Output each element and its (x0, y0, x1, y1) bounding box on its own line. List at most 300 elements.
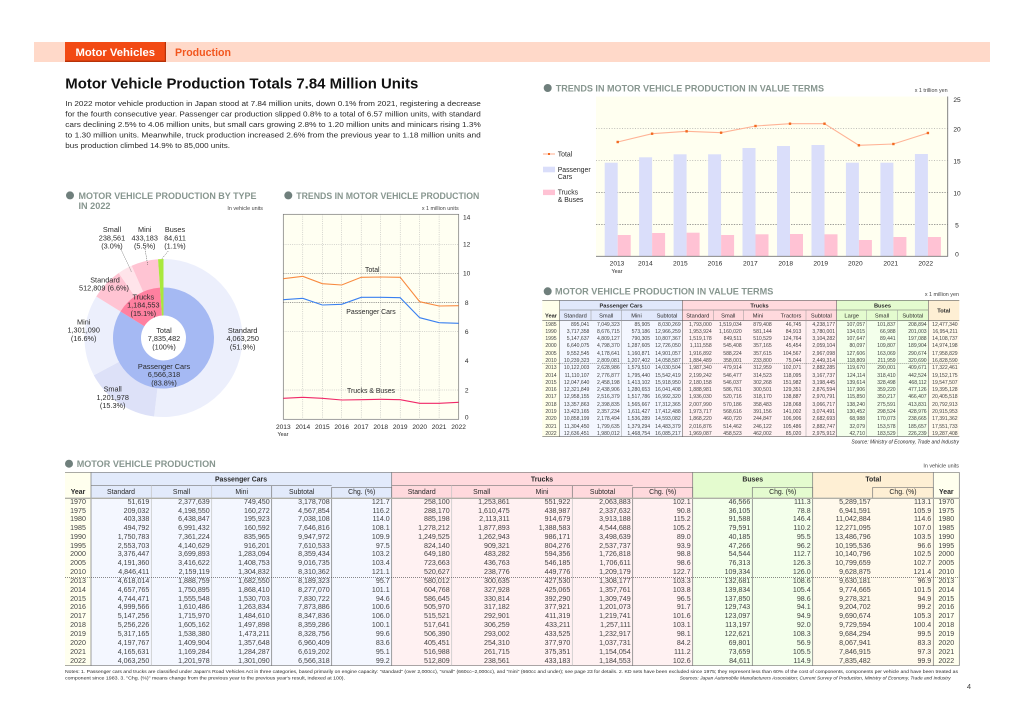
table data: 1970 to 2010: 804,276 (545, 542, 570, 550)
table data: 1970 to 2010: 546,185 (545, 559, 570, 567)
table data: 17,312,365 (655, 402, 681, 408)
table data: 1970 to 2010: 121.7 (372, 498, 390, 506)
table column headers: Mini (536, 489, 549, 496)
table data: 12,726,050 (655, 343, 681, 349)
notes: Sources: Japan Automobile Manufacturers Association; Current Survey of Production, Ministry of Economy, Trade and Industry (680, 675, 951, 681)
panel: value trends (543, 82, 961, 275)
donut labels: Mini (138, 225, 152, 234)
table data: 1970 to 2010: 551,922 (545, 498, 570, 506)
table data: 1970 to 2010: 10,799,659 (835, 559, 871, 567)
table data: 2013 to 2022: 433,211 (545, 621, 570, 629)
table data: 10,807,367 (655, 336, 681, 342)
table data: 460,720 (723, 416, 742, 422)
table data: 1970 to 2010: 114.6 (914, 515, 931, 523)
table column headers: Standard (564, 314, 587, 320)
table column headers (71, 476, 954, 496)
table data: 2013 to 2022: 132,681 (725, 577, 750, 585)
table data: 1970 to 2010: 112.7 (793, 550, 811, 558)
y axis labels (953, 97, 961, 258)
donut labels: Passenger Cars (138, 362, 191, 371)
x axis labels: 2015 (315, 424, 330, 431)
line chart (283, 214, 459, 419)
table data: 1970 to 2010: 54,544 (729, 550, 750, 558)
table data: 17,322,461 (932, 365, 958, 371)
table data: 2,967,098 (812, 351, 835, 357)
table data: 1970 to 2010: 116.2 (372, 507, 390, 515)
table data: 16,954,211 (933, 329, 958, 335)
table data: 1,611,427 (628, 409, 650, 415)
table data: 12,958,155 (564, 394, 589, 400)
x axis labels (276, 424, 466, 438)
table data: 358,483 (753, 402, 772, 408)
table data: 3,167,737 (812, 373, 835, 379)
donut labels: 1,201,978 (96, 393, 129, 402)
table data: 211,959 (878, 358, 896, 364)
table data: 1970 to 2010: 909,321 (484, 542, 510, 550)
donut labels: 4,063,250 (226, 334, 259, 343)
table data: 197,088 (908, 336, 927, 342)
table data: 1970 to 2010: 105.2 (673, 524, 691, 532)
table data: 1,953,924 (689, 329, 712, 335)
table data: 1970 to 2010: 1970 (70, 498, 86, 506)
donut labels: (1.1%) (164, 242, 186, 251)
table data: 11,304,450 (564, 424, 589, 430)
table data: 189,904 (908, 343, 927, 349)
x axis labels: 2020 (848, 261, 863, 268)
table data: 2013 to 2022: 83.3 (917, 639, 931, 647)
table data: 298,524 (877, 409, 896, 415)
table data: 2013 to 2022: 84,611 (729, 657, 750, 665)
table data: 1970 to 2010: 1,408,753 (238, 559, 270, 567)
table data: 2013 to 2022: 580,012 (424, 577, 450, 585)
table data: 19,152,175 (932, 373, 958, 379)
y axis labels: 12 (463, 242, 471, 249)
header band (34, 42, 990, 62)
table data: 2,449,314 (812, 358, 835, 364)
table data: 2013 to 2022: 2015 (70, 595, 86, 603)
table data: 1970 to 2010: 195,923 (244, 515, 270, 523)
table data: 1970 to 2010: 108.1 (372, 524, 390, 532)
table data: 2013 to 2022: 7,835,482 (839, 657, 871, 665)
table data: 233,800 (753, 358, 772, 364)
table data: 1970 to 2010: 114.0 (372, 515, 390, 523)
donut labels (67, 225, 259, 410)
table data: 2013 to 2022: 2021 (938, 648, 954, 656)
table data: 1970 to 2010: 2,113,311 (479, 515, 510, 523)
table data: 2013 to 2022: 1,309,749 (599, 595, 631, 603)
table data: 2013 to 2022: 94.9 (917, 595, 931, 603)
table data: 2013 to 2022: 1,201,073 (599, 603, 631, 611)
table data: 1970 to 2010: 6,941,591 (839, 507, 871, 515)
table data: 12,477,340 (932, 322, 958, 328)
legend: Total (558, 151, 573, 158)
table data: 2013 to 2022: 293,002 (484, 630, 510, 638)
table data: 46,745 (786, 322, 801, 328)
table column headers: Year (545, 314, 558, 320)
table data: 2,199,242 (689, 373, 712, 379)
table data: 1970 to 2010: 96.2 (797, 542, 811, 550)
y axis labels: 20 (953, 126, 961, 133)
series labels (346, 267, 396, 395)
table data: 2,628,986 (597, 365, 620, 371)
table data: 2013 to 2022: 100.6 (372, 603, 390, 611)
intro paragraph (65, 99, 481, 150)
tab: Motor Vehicles (65, 42, 166, 62)
y axis labels: 8 (465, 300, 469, 307)
table data: 1970 to 2010: 1,262,943 (478, 533, 510, 541)
table data: 115,850 (847, 394, 865, 400)
table data: 2013 to 2022: 392,290 (545, 595, 570, 603)
x axis labels: 2018 (373, 424, 388, 431)
table data: 1970 to 2010: 1,610,475 (478, 507, 510, 515)
table data: 2,180,158 (689, 380, 712, 386)
table data: 1970 to 2010: 483,282 (484, 550, 510, 558)
table data: 1970 to 2010: 4,198,550 (178, 507, 210, 515)
table data: 2013 to 2022: 83.6 (376, 639, 390, 647)
table data: 2,016,876 (689, 424, 712, 430)
table data: 2013 to 2022: 433,525 (545, 630, 570, 638)
table data: 1,799,635 (597, 424, 620, 430)
table data: 2013 to 2022: 9,729,594 (839, 621, 871, 629)
table data: 45,454 (786, 343, 801, 349)
table data: 66,988 (880, 329, 896, 335)
table data: 2013 to 2022: 97.3 (917, 648, 931, 656)
table data: 290,001 (877, 365, 896, 371)
table data: 2013 to 2022: 586,645 (424, 595, 450, 603)
legend (543, 151, 591, 204)
table data: 2013 to 2022: 2014 (70, 586, 86, 594)
x axis labels: 2019 (813, 261, 828, 268)
table data: 1970 to 2010: 1975 (938, 507, 954, 515)
table data: 2013 to 2022: 261,715 (484, 648, 510, 656)
x axis labels: Year (612, 269, 623, 275)
table data: 1970 to 2010: 7,361,224 (178, 533, 210, 541)
unit note: x 1 million yen (925, 292, 959, 298)
table data: 1970 to 2010: 449,776 (545, 568, 570, 576)
table data: 2,178,494 (597, 416, 620, 422)
donut labels: (100%) (152, 342, 176, 352)
table data: 3,780,001 (812, 329, 835, 335)
table data: 2013 to 2022: 4,657,765 (118, 586, 149, 594)
table data: 3,104,282 (812, 336, 835, 342)
table data: 2,007,990 (689, 402, 712, 408)
table data: 2013 to 2022: 1,284,287 (238, 648, 270, 656)
table data: 2,357,234 (597, 409, 620, 415)
table data: 1970 to 2010: 103.4 (372, 559, 390, 567)
table lines (542, 300, 959, 437)
table data: 4,178,641 (597, 351, 620, 357)
table data: 1970 to 2010: 115.2 (673, 515, 691, 523)
table data: 107,057 (847, 322, 865, 328)
table data: 1970 to 2010: 4,140,629 (178, 542, 210, 550)
x axis labels: 2014 (638, 261, 653, 268)
table data: 16,992,320 (655, 394, 681, 400)
table data: 2013 to 2022: 1,473,211 (239, 630, 270, 638)
table data: 1970 to 2010: 2,159,119 (179, 568, 210, 576)
y axis labels: 25 (953, 97, 961, 104)
table data: 185,657 (908, 424, 927, 430)
table data: 15,542,419 (655, 373, 681, 379)
table data: 2013 to 2022: 425,065 (545, 586, 570, 594)
table data: 1970 to 2010: 105.9 (913, 507, 931, 515)
table data: 2013 to 2022: 101.1 (372, 586, 390, 594)
series labels: Passenger Cars (346, 309, 396, 316)
table data: 358,001 (723, 358, 742, 364)
table data: 1,868,220 (689, 416, 712, 422)
table data: 101,837 (877, 322, 896, 328)
table column headers: Subtotal (811, 314, 832, 320)
table data: 2013 to 2022: 105.5 (793, 648, 811, 656)
table data: 2013 to 2022: 108.3 (793, 630, 811, 638)
x axis labels: 2016 (334, 424, 349, 431)
table data: 462,002 (753, 431, 772, 437)
table data: 2013 to 2022: 427,530 (545, 577, 570, 585)
table data: 2013 to 2022: 1,154,054 (599, 648, 631, 656)
table data: 1970 to 2010: 3,913,188 (599, 515, 631, 523)
donut chart (84, 259, 242, 417)
table data: 80,097 (849, 343, 865, 349)
notes: component since 1983. 3. "Chg. (%)" means change from the previous year to the previous year's result, indexed at 100). (65, 675, 345, 681)
table data: 2013 to 2022: 56.9 (797, 639, 811, 647)
table data: 2013 to 2022: 7,846,915 (839, 648, 871, 656)
table data: 391,156 (753, 409, 772, 415)
intro paragraph: for the fourth consecutive year. Passenger car production slipped 0.8% to a total of 6.57 million units, with standard (65, 110, 481, 118)
line: total (283, 276, 459, 306)
table column headers: Subtotal (657, 314, 677, 320)
table data: 2013 to 2022: 254,310 (484, 639, 510, 647)
table data: 2013 to 2022: 2021 (70, 648, 86, 656)
table data: 117,906 (847, 387, 865, 393)
x axis labels: 2021 (432, 424, 447, 431)
legend: & Buses (558, 197, 584, 204)
heading (66, 190, 256, 211)
table data: 581,144 (753, 329, 772, 335)
table data: 1970 to 2010: 121.4 (913, 568, 931, 576)
table data: 2013 to 2022: 6,960,409 (298, 639, 330, 647)
table data: 1,160,871 (627, 351, 650, 357)
unit note: x 1 trillion yen (915, 88, 948, 94)
table data: 2013 to 2022: 377,921 (545, 603, 570, 611)
series labels: Total (365, 267, 380, 274)
table data: 1,519,178 (689, 336, 712, 342)
table data: 1,980,012 (597, 431, 620, 437)
table data: 84,913 (786, 329, 801, 335)
table data: 1990 (545, 329, 557, 335)
table data: 1970 to 2010: 93.9 (677, 542, 691, 550)
table data: 2013 to 2022: 1,357,761 (599, 586, 631, 594)
table data: 118,095 (783, 373, 801, 379)
table data: 568,616 (723, 409, 742, 415)
x axis labels: 2016 (708, 261, 723, 268)
legend: Passenger (558, 167, 591, 174)
table data: 413,831 (908, 402, 927, 408)
table data: 1,280,653 (627, 387, 650, 393)
table data: 5,147,637 (567, 336, 589, 342)
table data: 13,357,863 (564, 402, 589, 408)
x axis labels: 2022 (918, 261, 933, 268)
table data: 107,647 (847, 336, 865, 342)
table data: 1970 to 2010: 2000 (70, 550, 86, 558)
table column headers: Standard (686, 314, 709, 320)
table data: 879,408 (753, 322, 772, 328)
heading: MOTOR VEHICLE PRODUCTION (77, 458, 216, 469)
table data: 14,058,587 (655, 358, 681, 364)
table data: 2013 to 2022: 604,768 (424, 586, 450, 594)
table data: 20,405,518 (932, 394, 958, 400)
table data: 2013 to 2022: 91.7 (677, 603, 691, 611)
table data: 19,547,507 (932, 380, 958, 386)
table data: 17,391,362 (932, 416, 958, 422)
table column headers: Mini (631, 314, 642, 320)
table data: 75,044 (786, 358, 801, 364)
table data: 1970 to 2010: 79,591 (729, 524, 750, 532)
table column headers: Trucks (531, 476, 553, 483)
table data: 138,240 (847, 402, 865, 408)
table data: 2013 to 2022: 1,037,731 (599, 639, 631, 647)
table data: 2013 to 2022: 512,809 (424, 657, 450, 665)
table data: 3,717,358 (567, 329, 589, 335)
table data: 520,716 (723, 394, 742, 400)
table data: 1970 to 2010: 126.3 (793, 559, 811, 567)
table column headers: Mini (235, 489, 248, 496)
table data: 104,567 (783, 351, 801, 357)
table data: 2013 to 2022: 1,750,895 (178, 586, 210, 594)
table data: 105,486 (783, 424, 801, 430)
table data: 1970 to 2010: 98.6 (677, 559, 691, 567)
table data: 141,002 (783, 409, 801, 415)
table data: 1970 to 2010: 109,334 (725, 568, 750, 576)
table data: 312,959 (753, 365, 772, 371)
donut labels: 1,301,090 (67, 326, 100, 335)
table column headers: Chg. (%) (348, 489, 375, 496)
table data: 1,519,034 (719, 322, 742, 328)
table data: 2013 to 2022: 108.6 (793, 577, 811, 585)
table data: 1970 to 2010: 288,170 (424, 507, 450, 515)
table data: 318,410 (877, 373, 896, 379)
table data: 1970 to 2010: 436,763 (484, 559, 510, 567)
table data: 2013 to 2022: 114.9 (793, 657, 811, 665)
table column headers: Small (173, 489, 191, 496)
table data: 302,268 (753, 380, 772, 386)
intro paragraph: bus production climbed 14.9% to 85,000 units. (65, 141, 230, 150)
panel: production trends (276, 190, 480, 438)
table data: 318,170 (753, 394, 772, 400)
table data: 1970 to 2010: 824,140 (424, 542, 450, 550)
table data: 2013 to 2022: 8,277,070 (298, 586, 330, 594)
table data: 2013 to 2022: 9,774,665 (839, 586, 871, 594)
table data: 89,441 (880, 336, 896, 342)
table column headers: Passenger Cars (215, 476, 267, 483)
table data: 1970 to 2010: 103.2 (372, 550, 390, 558)
table data: 1,884,489 (689, 358, 712, 364)
table data: 2013 to 2022: 103.8 (673, 586, 691, 594)
leader lines (121, 248, 168, 272)
table data: 2013 to 2022: 8,347,836 (298, 612, 330, 620)
table data: 139,614 (847, 380, 865, 386)
table data: 246,122 (753, 424, 772, 430)
panel: intro (65, 76, 481, 150)
table data: 1970 to 2010: 3,178,708 (298, 498, 330, 506)
table data: 2013 to 2022: 9,278,321 (839, 595, 871, 603)
table data: 119,670 (847, 365, 865, 371)
table data: 1970 to 2010: 494,792 (124, 524, 149, 532)
table data: 2013 to 2022: 2016 (70, 603, 86, 611)
y axis labels: 0 (955, 252, 959, 258)
table data: 1970 to 2010: 2,063,883 (599, 498, 631, 506)
table data: 2013 to 2022: 1,409,904 (178, 639, 210, 647)
table column headers: Total (937, 308, 951, 314)
table data: 2,809,081 (597, 358, 620, 364)
table data: 208,894 (908, 322, 927, 328)
table data: 2020 (545, 416, 557, 422)
table data: 2013 to 2022: 73,659 (729, 648, 750, 656)
table data: 1970 to 2010: 46,566 (729, 498, 750, 506)
table data: 2013 to 2022: 1,605,162 (178, 621, 210, 629)
table data: 2013 to 2022: 6,619,202 (298, 648, 330, 656)
table data: 1970 to 2010: 8,359,434 (298, 550, 330, 558)
table data: 2013 to 2022: 4,618,014 (118, 577, 149, 585)
table data: 201,003 (908, 329, 927, 335)
tab: Motor Vehicles: Motor Vehicles (76, 47, 155, 59)
table data: 1970 to 2010: 9,628,875 (839, 568, 871, 576)
table data: 1970 to 2010: 520,627 (424, 568, 450, 576)
table data: 1,160,020 (719, 329, 742, 335)
table data: 1970 to 2010: 885,198 (424, 515, 450, 523)
x axis labels: 2015 (673, 261, 688, 268)
table data: 12,636,451 (564, 431, 589, 437)
table data: 102,071 (783, 365, 801, 371)
table data: 1970 to 2010: 4,544,688 (599, 524, 631, 532)
table data: 151,982 (783, 380, 801, 386)
table data: 2013 to 2022: 95.1 (376, 648, 390, 656)
table data: 2013 to 2022: 1,257,111 (600, 621, 631, 629)
table data: 2013 to 2022: 1,263,834 (238, 603, 270, 611)
table data: 1970 to 2010: 6,991,432 (178, 524, 210, 532)
table data: 2013 to 2022: 98.6 (797, 595, 811, 603)
table data: 128,068 (783, 402, 801, 408)
table data: 2015 (545, 380, 557, 386)
table data: 1,795,440 (627, 373, 650, 379)
table data: 2013 to 2022: 4,197,767 (118, 639, 149, 647)
table data: 1970 to 2010: 160,592 (244, 524, 270, 532)
table data: 2021 (545, 424, 557, 430)
table data: 2,458,198 (597, 380, 620, 386)
table data: 546,477 (723, 373, 742, 379)
y axis labels (463, 214, 471, 422)
x axis labels: 2020 (412, 424, 427, 431)
table column headers: Subtotal (590, 489, 616, 496)
table data: 20,915,953 (932, 409, 958, 415)
table data: 586,761 (723, 387, 742, 393)
table data: 1970 to 2010: 90.8 (677, 507, 691, 515)
table data: 2013 to 2022: 99.6 (376, 630, 390, 638)
unit note: x 1 million units (422, 206, 459, 212)
table data: 1970 to 2010: 98.8 (677, 550, 691, 558)
table data: 1,287,605 (627, 343, 650, 349)
donut labels: Total (156, 326, 172, 335)
table data: 2013 to 2022: 111.2 (674, 648, 691, 656)
table data: 3,198,445 (812, 380, 835, 386)
table column headers: Small (473, 489, 491, 496)
table data: 2019 (545, 409, 557, 415)
table data: 1970 to 2010: 146.4 (793, 515, 811, 523)
table data: 1970 to 2010: 914,679 (545, 515, 570, 523)
table data: 2013 to 2022: 69,801 (729, 639, 750, 647)
table data: 2013 to 2022: 4,999,566 (118, 603, 149, 611)
donut labels: 512,809 (6.6%) (79, 284, 129, 293)
table column headers: Chg. (%) (769, 489, 796, 496)
table data: 2013 to 2022: 1,610,486 (178, 603, 210, 611)
